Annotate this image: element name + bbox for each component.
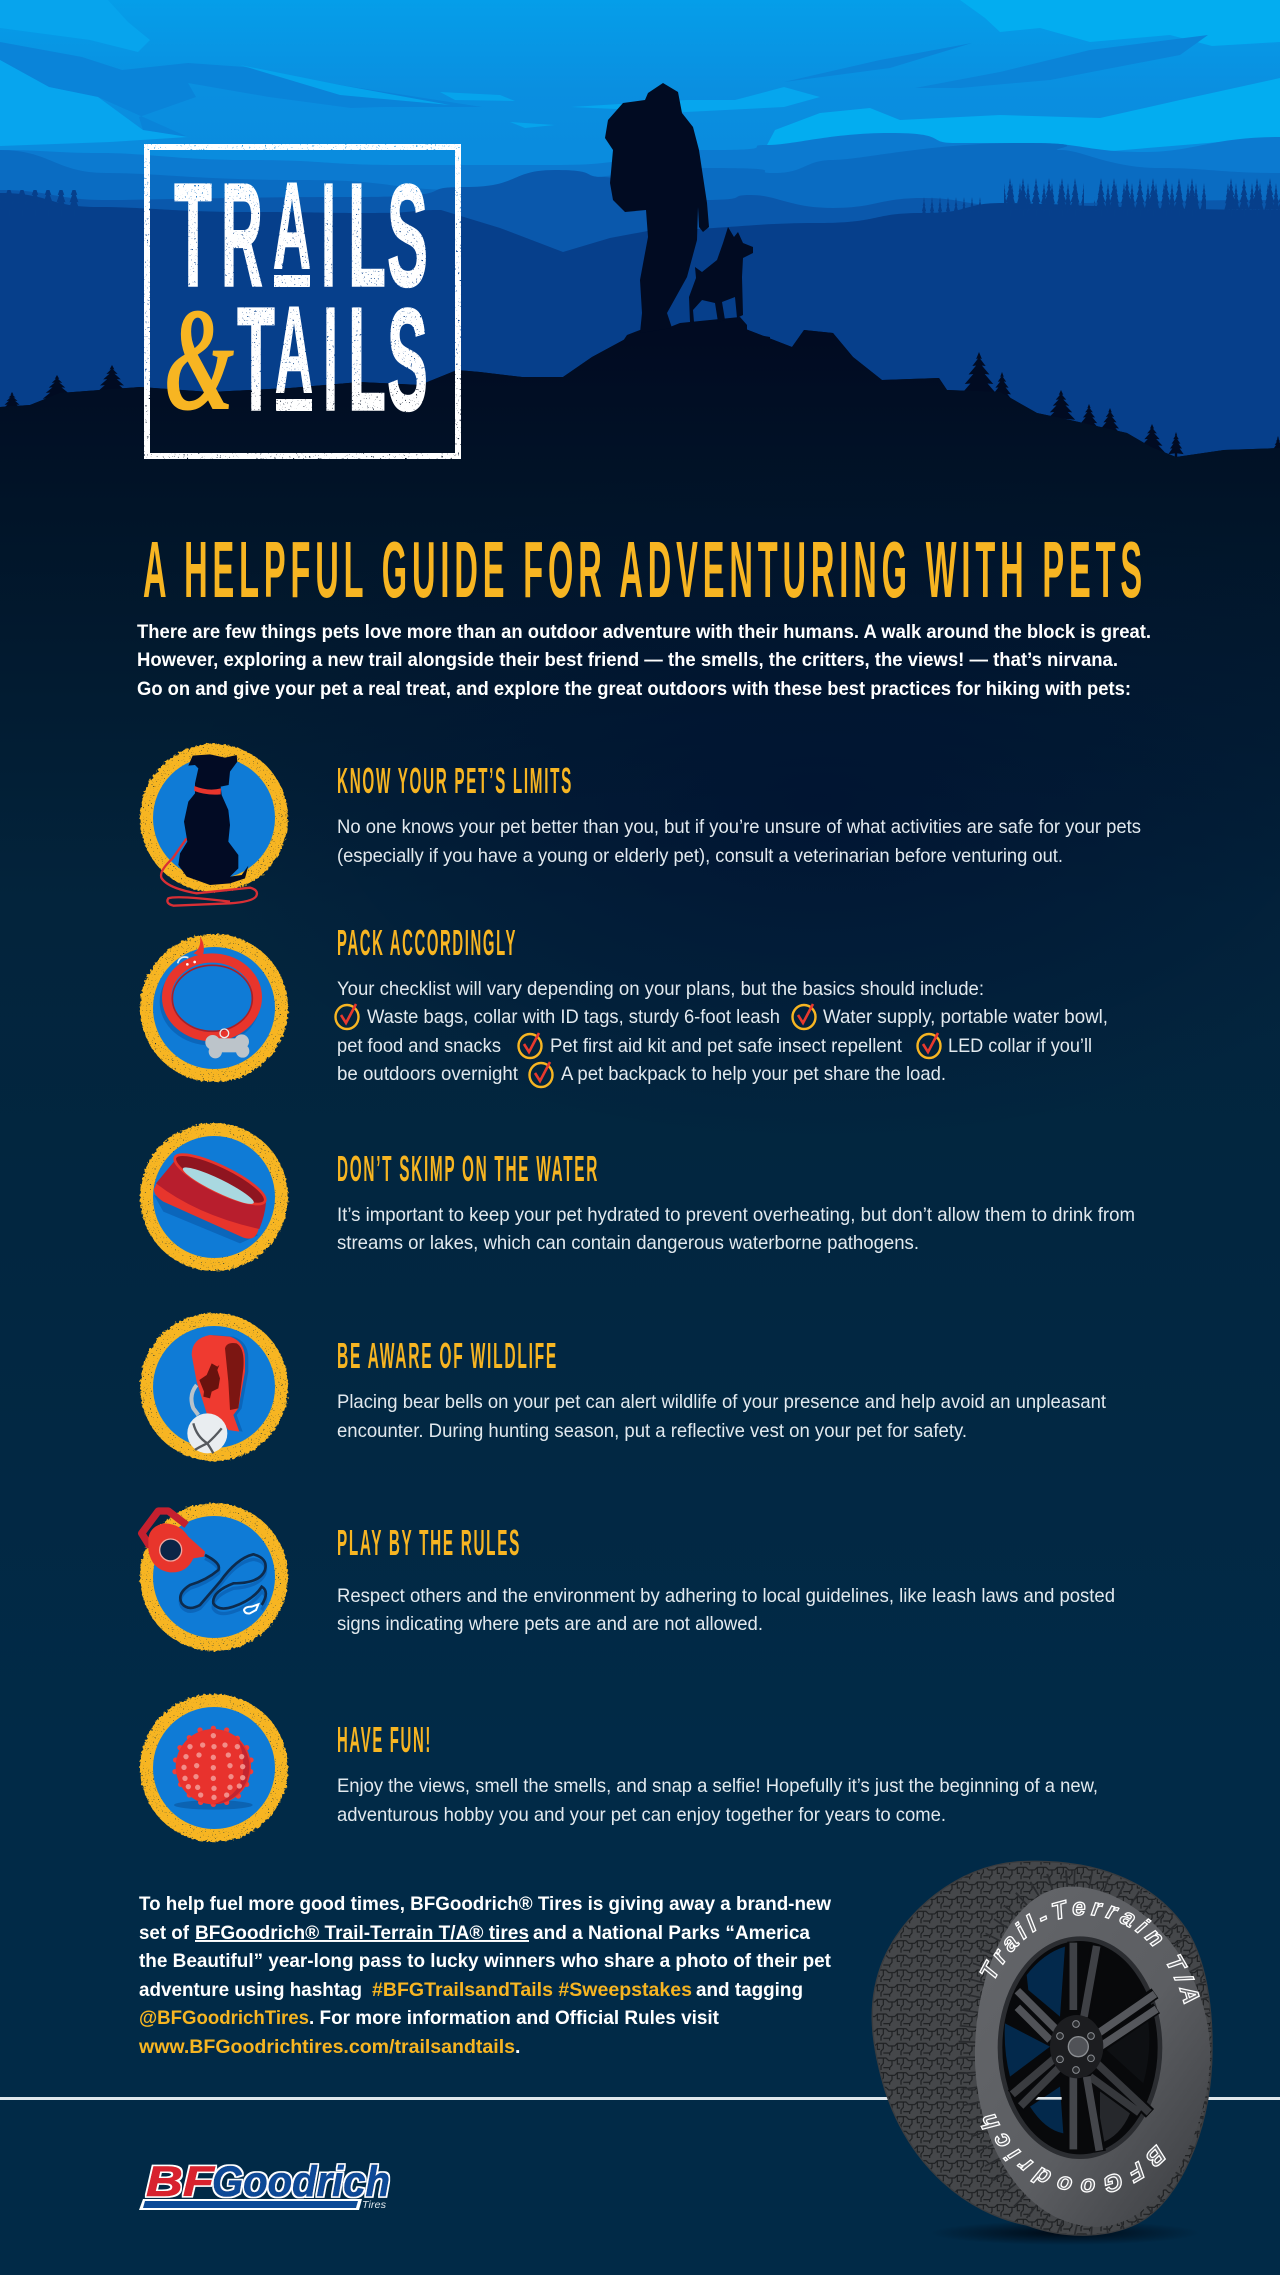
sweepstakes text: and a National Parks “America <box>533 1922 810 1944</box>
checklist body: Waste bags, collar with ID tags, sturdy 6-foot leash <box>367 1006 780 1028</box>
badge: retractable leash <box>140 1503 288 1651</box>
badge: bear bell <box>140 1313 288 1461</box>
tire shadow <box>930 2221 1200 2245</box>
checklist body: be outdoors overnight <box>337 1063 519 1085</box>
badge: collar <box>140 934 288 1082</box>
logo wordmark: T <box>237 277 275 442</box>
logo wordmark: I <box>321 153 336 318</box>
ridge 3 <box>0 170 1280 340</box>
logo wordmark: L <box>348 277 386 442</box>
body: (especially if you have a young or elderly pet), consult a veterinarian before venturing out. <box>337 845 1063 867</box>
sweepstakes text: #BFGTrailsandTails #Sweepstakes <box>372 1979 692 2001</box>
shoulder lugs <box>975 1887 1210 2227</box>
section 3: don't skimp on the water <box>140 1123 1135 1271</box>
logo wordmark: T <box>174 153 212 318</box>
section 1: know your pet's limits: KNOW YOUR PET’S LIMITS <box>337 760 573 801</box>
body: It’s important to keep your pet hydrated to prevent overheating, but don’t allow them to drink from <box>337 1204 1135 1226</box>
logo wordmark <box>174 153 428 442</box>
section 4: be aware of wildlife: BE AWARE OF WILDLIFE <box>337 1335 558 1376</box>
section 2: pack accordingly <box>140 922 1108 1087</box>
body: No one knows your pet better than you, but if you’re unsure of what activities are safe for your pets <box>337 816 1141 838</box>
section 1: know your pet's limits <box>140 744 1141 906</box>
checklist body: Pet first aid kit and pet safe insect repellent <box>550 1035 903 1057</box>
BFGoodrich logo <box>139 2158 390 2211</box>
checklist body: LED collar if you’ll <box>948 1035 1092 1057</box>
body: Respect others and the environment by adhering to local guidelines, like leash laws and posted <box>337 1585 1115 1607</box>
section 6: have fun <box>140 1694 1098 1842</box>
checklist body: A pet backpack to help your pet share the load. <box>561 1063 946 1085</box>
section 2: pack accordingly: PACK ACCORDINGLY <box>337 922 517 963</box>
Trails & Tails logo: S <box>387 278 428 441</box>
sweepstakes text: and tagging <box>696 1979 803 2001</box>
sweepstakes text: . <box>515 2036 520 2058</box>
sky <box>0 0 1280 300</box>
foreground silhouette <box>0 328 1280 700</box>
dog <box>689 227 753 322</box>
body <box>337 1204 1135 1254</box>
BFGoodrich logo: BF <box>146 2158 216 2206</box>
divider line <box>0 2097 1280 2100</box>
section 4: be aware of wildlife <box>140 1313 1107 1461</box>
body: adventurous hobby you and your pet can enjoy together for years to come. <box>337 1804 946 1826</box>
BFGoodrich logo: Tires <box>362 2200 386 2211</box>
hero scene: sky and mountains <box>0 0 1280 700</box>
badge: sitting dog <box>140 744 288 906</box>
body: streams or lakes, which can contain dangerous waterborne pathogens. <box>337 1232 919 1254</box>
section 6: have fun: HAVE FUN! <box>337 1719 432 1760</box>
logo wordmark: A <box>275 282 313 419</box>
body: signs indicating where pets are and are not allowed. <box>337 1613 763 1635</box>
section 3: don't skimp on the water: DON’T SKIMP ON THE WATER <box>337 1148 599 1189</box>
section 5: play by the rules <box>140 1503 1115 1651</box>
checklist body: pet food and snacks <box>337 1035 501 1057</box>
tire <box>872 1860 1213 2243</box>
rock <box>600 317 770 380</box>
BFGoodrich logo: Goodrich <box>212 2158 390 2206</box>
intro text: There are few things pets love more than an outdoor adventure with their humans. A walk around the block is great. <box>137 621 1151 643</box>
checklist body: Your checklist will vary depending on your plans, but the basics should include: <box>337 978 984 1000</box>
body: encounter. During hunting season, put a reflective vest on your pet for safety. <box>337 1420 967 1442</box>
checklist body: Water supply, portable water bowl, <box>823 1006 1108 1028</box>
sidewall lettering: BFGoodrich <box>980 2114 1166 2193</box>
section 5: play by the rules: PLAY BY THE RULES <box>337 1522 521 1563</box>
sweepstakes text: adventure using hashtag <box>139 1979 362 2001</box>
body <box>337 1775 1098 1826</box>
badge: spiky ball <box>140 1694 288 1842</box>
far ridge <box>0 133 1280 300</box>
sidewall lettering: Trail-Terrain T/A <box>979 1899 1200 2005</box>
sweepstakes text: . For more information and Official Rules visit <box>309 2007 719 2029</box>
body: Placing bear bells on your pet can alert wildlife of your presence and help avoid an unpleasant <box>337 1391 1107 1413</box>
intro text: Go on and give your pet a real treat, and explore the great outdoors with these best practices for hiking with pets: <box>137 678 1131 700</box>
checklist body <box>336 978 1108 1087</box>
Trails & Tails logo <box>144 144 461 459</box>
tread <box>872 1861 1212 2235</box>
intro text <box>137 621 1151 700</box>
badge: water bowl <box>140 1123 288 1271</box>
sidewall lettering <box>979 1899 1200 2193</box>
Trails & Tails logo: S <box>387 154 428 317</box>
sweepstakes text: BFGoodrich® Trail-Terrain T/A® tires <box>195 1922 529 1944</box>
tree lines on ridge <box>0 178 1280 216</box>
logo frame <box>144 144 461 459</box>
foreground trees <box>2 352 1280 458</box>
ridge 2 <box>0 143 1280 320</box>
logo wordmark: R <box>221 153 263 318</box>
body <box>337 1391 1107 1442</box>
sidewall <box>975 1887 1210 2227</box>
ampersand: & <box>165 278 235 442</box>
sweepstakes text <box>138 1893 832 2058</box>
logo wordmark: L <box>348 153 386 318</box>
logo wordmark: I <box>323 277 338 442</box>
ridge 4 with tree line <box>0 193 1280 500</box>
body: Enjoy the views, smell the smells, and snap a selfie! Hopefully it’s just the beginning of a new, <box>337 1775 1098 1797</box>
intro text: However, exploring a new trail alongside their best friend — the smells, the critters, the views! — that’s nirvana. <box>137 649 1118 671</box>
sweepstakes text: To help fuel more good times, BFGoodrich® Tires is giving away a brand-new <box>139 1893 832 1915</box>
sweepstakes text: www.BFGoodrichtires.com/trailsandtails <box>138 2036 515 2058</box>
sweepstakes text: set of <box>139 1922 189 1944</box>
sweepstakes text: @BFGoodrichTires <box>139 2007 309 2029</box>
wheel <box>998 1937 1162 2158</box>
clouds <box>0 0 1280 152</box>
body <box>337 816 1141 867</box>
hiker <box>605 83 709 333</box>
sweepstakes text: the Beautiful” year-long pass to lucky winners who share a photo of their pet <box>139 1950 831 1972</box>
logo wordmark: A <box>273 158 311 295</box>
body <box>337 1585 1115 1635</box>
